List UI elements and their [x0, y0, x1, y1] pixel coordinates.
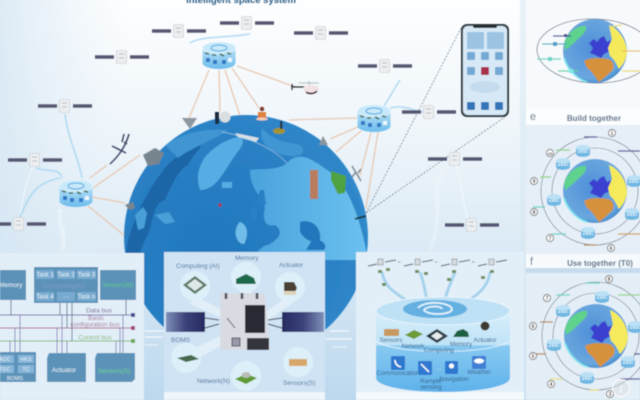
icon: jet right — [319, 136, 328, 145]
pool labels: sensing — [420, 384, 442, 391]
hub: right constellation node — [358, 105, 390, 132]
heading: use together: Use together (T0) — [567, 259, 633, 268]
top mini globe with ring — [536, 17, 640, 85]
pool resources — [384, 322, 490, 343]
arrow: middle to right — [326, 331, 352, 347]
icon: person — [256, 107, 268, 120]
icon: green field — [331, 171, 346, 194]
panel: right column background — [526, 0, 640, 400]
pool labels: Navigation — [439, 376, 469, 383]
pointer beams — [190, 290, 294, 358]
icon: train — [310, 170, 318, 199]
icon: fighter top-left — [182, 118, 197, 129]
chart: build together orbits: 1 — [611, 131, 614, 137]
bus labels: Data bus — [86, 308, 113, 314]
computing box: Computing(AI) — [43, 283, 85, 290]
chart: use together orbits: 7 — [546, 296, 549, 302]
circle: BOMS — [171, 343, 201, 373]
pool labels: Weather — [467, 369, 491, 376]
orbit satellites — [533, 137, 640, 245]
BOMS box — [0, 352, 36, 382]
satellites — [0, 16, 499, 232]
bus labels: Control bus — [78, 334, 112, 342]
circle: actuator — [275, 272, 305, 302]
panel: shared resource pool: ··· — [436, 367, 442, 373]
icon: info badge: i — [619, 382, 623, 396]
sensors S box — [95, 353, 135, 382]
bus labels: Basic — [88, 315, 105, 322]
chart: build together orbits: 10 — [548, 151, 553, 156]
chart: use together orbits: 4 — [550, 382, 553, 388]
BOMS box: TC — [22, 367, 30, 373]
icon: drone — [352, 166, 361, 181]
satellite module labels — [171, 255, 316, 387]
hub: top constellation node — [202, 42, 236, 69]
computing box: Task 3 — [78, 272, 96, 278]
service icons — [391, 356, 486, 375]
arrow: left to middle — [145, 331, 164, 345]
pool labels: Actuator — [473, 337, 497, 344]
bus labels: configuration bus — [70, 322, 120, 328]
globe — [123, 114, 369, 330]
heading: build together: Build together — [567, 114, 621, 123]
computing box: Task n — [78, 294, 95, 300]
actuator box — [47, 353, 86, 382]
tiny ground nodes — [378, 268, 494, 286]
label f: f — [530, 256, 534, 268]
data streams — [382, 272, 490, 303]
label e: e — [530, 111, 536, 123]
separator strip right — [520, 0, 526, 400]
pool labels: Rampte — [420, 378, 442, 385]
satellite module labels: Memory — [235, 255, 259, 262]
orbit satellites — [533, 283, 640, 390]
chart: build together orbits: 8 — [533, 210, 536, 216]
sensors box: Sensors(M) — [102, 283, 134, 289]
panel: hardware bus architecture — [0, 253, 144, 400]
icon: aircraft left globe — [125, 148, 164, 210]
pool labels: Memory — [450, 341, 473, 348]
chart: use together orbits: 8 — [608, 277, 611, 283]
computing box: ··· — [63, 294, 69, 300]
phone widgets — [467, 32, 504, 110]
icon: buoy ship — [273, 121, 285, 134]
chart: build together orbits: 9 — [533, 179, 536, 185]
panel: satellite payload — [164, 252, 325, 400]
chart: use together orbits: 3 — [609, 392, 612, 398]
blue beams between satellites and hubs — [19, 34, 425, 220]
satellite module labels: BOMS — [171, 337, 191, 344]
computing box — [34, 267, 98, 303]
computing box: Task 1 — [36, 272, 54, 278]
satellite module labels: Actuator — [279, 262, 304, 269]
chart: build together orbits: 6 — [610, 246, 613, 252]
BOMS box: BOMS — [7, 376, 23, 382]
icon: airplane left — [110, 134, 129, 164]
pool labels: Network — [402, 343, 425, 350]
chart: use together orbits: 6 — [532, 324, 535, 330]
buses — [0, 300, 133, 353]
circle: computing — [180, 271, 210, 301]
chart: use together orbits: 5 — [532, 354, 535, 360]
solar panels — [166, 312, 324, 332]
icon: cruise ship — [235, 133, 259, 142]
sensors box — [100, 270, 136, 300]
pool labels — [376, 337, 497, 391]
satellite module labels: Computing (AI) — [176, 263, 220, 270]
sensors S box: Sensors(S) — [98, 368, 130, 375]
satellite body — [220, 293, 270, 350]
hub: left constellation node — [60, 180, 92, 207]
mini satellites — [368, 260, 507, 266]
cylinder — [376, 297, 510, 392]
icon: ground antenna — [355, 216, 366, 219]
link lines to hubs — [88, 66, 378, 236]
satellite module labels: Network(N) — [197, 378, 230, 385]
pool labels: Computing — [424, 347, 455, 354]
computing box: Task 4 — [36, 294, 54, 300]
circle: memory — [231, 262, 261, 292]
panel: shared resource pool — [356, 252, 524, 400]
BOMS box: HKS — [20, 357, 32, 363]
icon: helicopter — [291, 81, 319, 93]
bus labels — [70, 308, 120, 342]
chart: use together orbits — [530, 276, 640, 398]
memory box — [0, 270, 26, 300]
chart: build together orbits — [530, 130, 640, 252]
dotted lines to phone — [366, 28, 505, 213]
water spray traces — [20, 165, 470, 250]
chart: build together orbits: 7 — [549, 236, 552, 242]
icon: info badge — [612, 380, 630, 396]
computing box: Task 2 — [57, 272, 75, 278]
pool labels: Sensors — [380, 337, 402, 344]
circle: sensors — [283, 347, 313, 377]
pool labels: Communication — [376, 370, 420, 377]
ring satellites — [537, 25, 640, 71]
ship track — [222, 132, 287, 163]
satellite module labels: Sensors(S) — [283, 380, 316, 387]
icon: radar dome — [215, 112, 230, 124]
circle: network — [231, 361, 261, 391]
phone — [461, 24, 509, 117]
actuator box: Actuator — [52, 367, 77, 374]
